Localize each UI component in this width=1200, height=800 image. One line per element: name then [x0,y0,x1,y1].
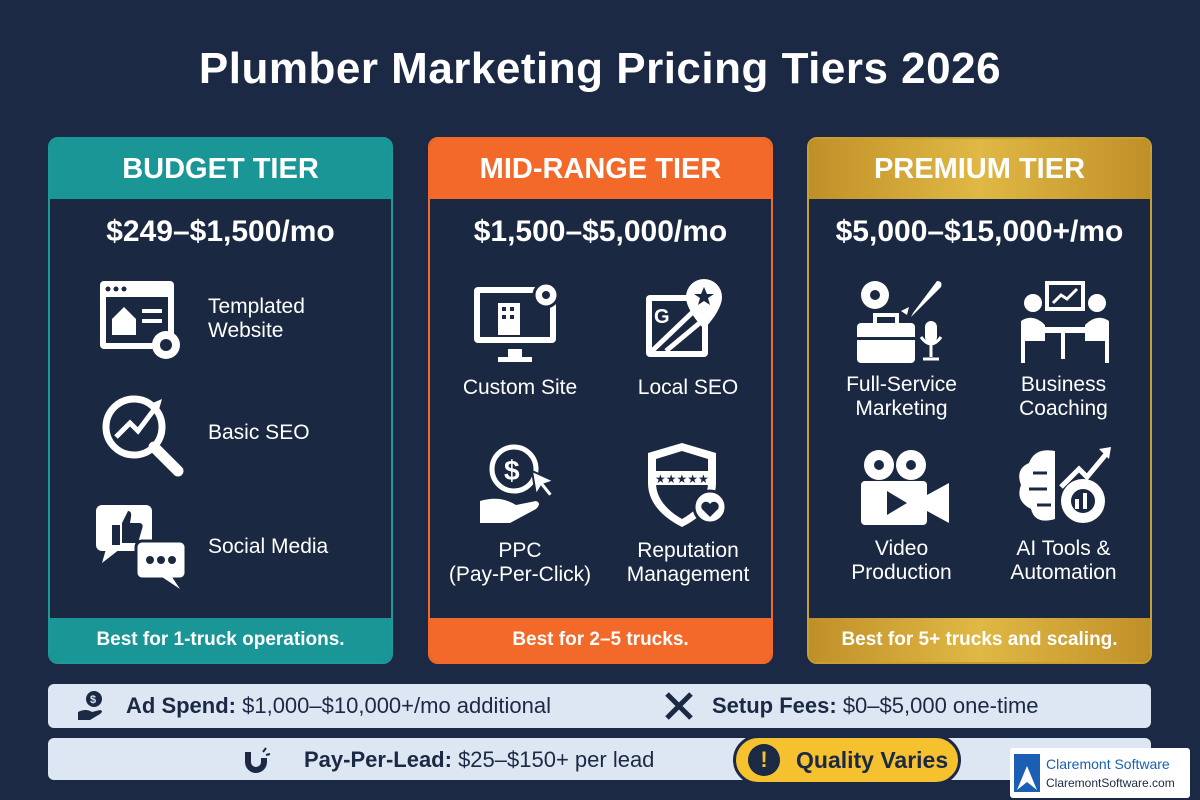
budget footer: Best for 1-truck operations. [96,629,345,650]
title: Plumber Marketing Pricing Tiers 2026 [199,44,1001,93]
text: ppc [449,539,591,586]
text: logo [1046,756,1175,790]
text: templated website: Templated [208,295,305,318]
icon: local seo [646,279,722,357]
budget header: BUDGET TIER [122,153,319,185]
logo: claremont software [1010,748,1190,798]
text: ai tools: AI Tools & [1016,537,1111,560]
text: ai tools [1010,537,1117,584]
text: custom site: Custom Site [463,376,577,399]
text: full-service marketing: Full-Service [846,373,957,396]
text: full-service marketing [846,373,957,420]
text: setup fees: Setup Fees: $0–$5,000 one-time [712,693,1039,718]
premium price: $5,000–$15,000+/mo [836,215,1123,248]
mid footer: Best for 2–5 trucks. [512,629,689,650]
icon: ai tools [1019,447,1111,523]
icon: reputation [648,443,724,527]
text: business coaching: Business [1021,373,1106,396]
text: logo: Claremont Software [1046,756,1170,772]
bar: ad spend & setup fees [48,684,1151,728]
badge: quality varies: Quality Varies [796,747,948,773]
text: business coaching [1019,373,1108,420]
text: reputation management [627,539,750,586]
mid header [430,139,771,199]
icon: local seo: G [654,306,670,328]
text: video production [851,537,952,584]
text: reputation management: Management [627,563,749,586]
mid footer [430,618,771,662]
text: full-service marketing: Marketing [855,397,948,420]
icon: magnet [245,747,270,773]
text: basic seo: Basic SEO [208,421,310,444]
panel: premium tier [807,137,1152,664]
badge: quality varies [733,735,961,785]
icon: logo mark [1014,754,1040,792]
text: video production: Production [851,561,952,584]
icon: exclamation [748,744,780,776]
text: video production: Video [875,537,928,560]
icon: social media [96,505,184,589]
budget price: $249–$1,500/mo [106,215,335,248]
text: ad spend: Ad Spend: $1,000–$10,000+/mo additional [126,693,551,718]
icon: tools [665,692,693,720]
icon: money hand: $ [90,694,96,706]
mid price: $1,500–$5,000/mo [474,215,727,248]
text: templated website: Website [208,319,283,342]
icon: video production [861,450,949,525]
text: reputation management: Reputation [637,539,739,562]
budget header [50,139,391,199]
icon: ppc [480,444,552,523]
premium header [809,139,1150,199]
icon: basic seo [102,396,184,476]
panel: mid-range tier [428,137,773,664]
icon: money hand [78,691,102,720]
text: ppc: PPC [498,539,542,562]
panel: budget tier [48,137,393,664]
text: pay-per-lead: Pay-Per-Lead: $25–$150+ per lead [304,747,654,772]
premium footer: Best for 5+ trucks and scaling. [841,629,1118,650]
icon: business coaching [1021,281,1109,363]
budget footer [50,618,391,662]
icon: custom site [474,284,556,362]
bar: pay-per-lead [48,738,1151,780]
premium footer [809,618,1150,662]
icon: website [100,281,180,359]
text: ppc: (Pay-Per-Click) [449,563,591,586]
mid header: MID-RANGE TIER [480,153,721,185]
text: local seo: Local SEO [638,376,738,399]
text: business coaching: Coaching [1019,397,1108,420]
icon: full-service [857,281,942,363]
icon: exclamation: ! [760,747,768,772]
icon: reputation: ★★★★★ [655,472,709,486]
text: ai tools: Automation [1010,561,1117,584]
premium header: PREMIUM TIER [874,153,1085,185]
text: logo: ClaremontSoftware.com [1046,776,1175,790]
icon: ppc: $ [504,455,520,486]
text: social media: Social Media [208,535,328,558]
text: templated website [208,295,305,342]
